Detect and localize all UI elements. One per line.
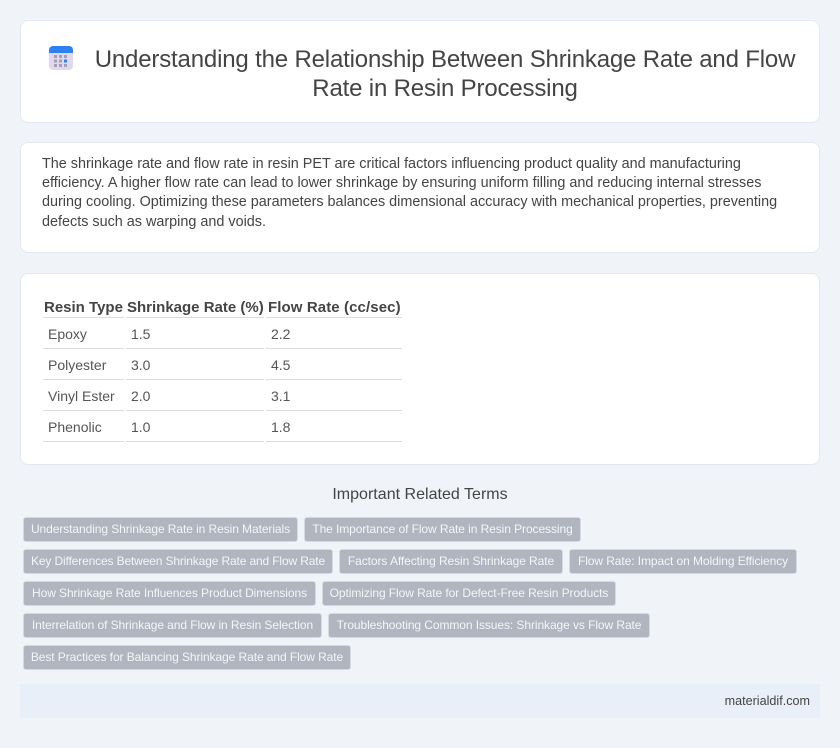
heading: related terms: Important Related Terms	[332, 486, 508, 503]
table: resin data: 1.5	[131, 326, 150, 342]
table: resin data: 3.1	[271, 388, 290, 404]
tags: related terms: Best Practices for Balancing Shrinkage Rate and Flow Rate	[31, 650, 343, 664]
tags: related terms: The Importance of Flow Rate in Resin Processing	[312, 522, 573, 536]
table: resin data: 4.5	[271, 357, 290, 373]
title: Understanding the Relationship Between Shrinkage Rate and Flow	[95, 46, 795, 73]
table: resin data: 1.0	[131, 419, 150, 435]
tags: related terms: Understanding Shrinkage Rate in Resin Materials	[31, 522, 290, 536]
icon: calendar	[49, 46, 73, 70]
tags: related terms: Flow Rate: Impact on Molding Efficiency	[578, 554, 788, 568]
title	[95, 46, 796, 102]
table: resin data: Vinyl Ester	[48, 388, 115, 404]
panel: description	[20, 142, 820, 253]
footer bar	[20, 684, 820, 718]
table: resin data: Polyester	[48, 357, 106, 373]
footer: site name: materialdif.com	[725, 694, 810, 708]
text block: description: The shrinkage rate and flow rate in resin PET are critical factors influencing product quality and manufacturing	[42, 156, 741, 172]
text block: description	[42, 156, 777, 230]
table: resin data	[43, 299, 402, 442]
tags: related terms: Interrelation of Shrinkage and Flow in Resin Selection	[32, 618, 313, 632]
table: resin data: Phenolic	[48, 419, 102, 435]
table: resin data: Shrinkage Rate (%)	[127, 299, 264, 316]
table: resin data: 2.2	[271, 326, 290, 342]
tags: related terms: How Shrinkage Rate Influences Product Dimensions	[32, 586, 307, 600]
table: resin data: 1.8	[271, 419, 290, 435]
table: resin data: 3.0	[131, 357, 150, 373]
table: resin data: 2.0	[131, 388, 150, 404]
tags: related terms: Troubleshooting Common Issues: Shrinkage vs Flow Rate	[337, 618, 641, 632]
tags: related terms: Key Differences Between Shrinkage Rate and Flow Rate	[31, 554, 325, 568]
table: resin data: Flow Rate (cc/sec)	[268, 299, 401, 316]
tags: related terms: Factors Affecting Resin Shrinkage Rate	[348, 554, 554, 568]
text block: description: efficiency. A higher flow rate can lead to lower shrinkage by ensuring uniform filling and reducing internal stresses	[42, 175, 761, 191]
tags: related terms	[23, 517, 797, 670]
text block: description: during cooling. Optimizing these parameters balances dimensional accuracy with mechanical properties, preventing	[42, 194, 777, 210]
title: Rate in Resin Processing	[312, 75, 578, 102]
text block: description: defects such as warping and voids.	[42, 214, 266, 230]
table: resin data: Epoxy	[48, 326, 87, 342]
table: resin data: Resin Type	[44, 299, 123, 316]
panel: title card	[20, 20, 820, 123]
panel: table card	[20, 273, 820, 465]
tags: related terms: Optimizing Flow Rate for Defect-Free Resin Products	[330, 586, 608, 600]
